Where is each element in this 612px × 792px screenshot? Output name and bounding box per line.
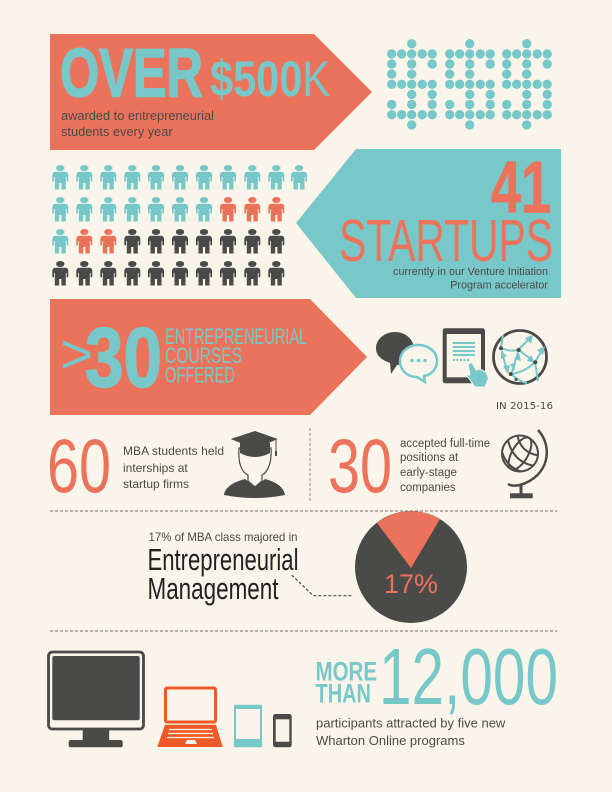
chart: people pictogram xyxy=(52,165,307,286)
text: entrepreneurial courses offered: COURSES xyxy=(165,343,242,368)
text: internships: startup firms xyxy=(123,477,189,491)
heading: more than: MORE xyxy=(316,657,377,687)
text: awarded: awarded to entrepreneurial xyxy=(61,108,214,123)
number: 60: 60 xyxy=(47,424,111,510)
arrow banner: salmon xyxy=(50,34,372,150)
text: 17% of class: 17% of MBA class majored in xyxy=(148,530,298,544)
block: entrepreneurial management xyxy=(148,530,352,606)
text: participants: participants attracted by five new xyxy=(316,715,506,730)
text: venture initiation: Program accelerator xyxy=(450,280,548,292)
text: positions: accepted full-time xyxy=(400,438,490,450)
heading: entrepreneurial management xyxy=(148,542,298,606)
text: awarded: students every year xyxy=(61,124,173,139)
heading: more than xyxy=(316,657,377,709)
text: venture initiation: currently in our Venture Initiation xyxy=(393,266,548,278)
icon: laptop xyxy=(157,688,223,747)
text: positions: companies xyxy=(400,482,456,494)
icon: desktop monitor xyxy=(48,652,144,747)
label: in 2015-16: IN 2015-16 xyxy=(496,401,553,412)
heading: $500K: $500K xyxy=(210,51,330,107)
pie chart: 17% xyxy=(355,511,467,623)
divider: vertical dashed xyxy=(309,428,311,502)
icon: globe xyxy=(497,430,547,498)
icon: phone xyxy=(273,714,292,747)
heading: OVER: OVER xyxy=(60,34,203,112)
panel: 41 startups xyxy=(296,148,561,298)
leader line xyxy=(292,575,352,596)
divider xyxy=(50,630,557,632)
text: internships: MBA students held xyxy=(123,444,224,458)
stat: 60 MBA students xyxy=(47,424,285,510)
stat: 30 full-time xyxy=(328,424,547,510)
text: positions: early-stage xyxy=(400,467,457,479)
heading: entrepreneurial management: Management xyxy=(148,571,279,606)
text: internships: interships at xyxy=(123,461,188,475)
text: entrepreneurial courses offered: OFFERED xyxy=(165,363,235,388)
text: entrepreneurial courses offered: ENTREPRENEURIAL xyxy=(165,324,307,349)
icon: chat bubbles xyxy=(376,332,437,382)
icon: dollar signs made of dots xyxy=(387,39,552,130)
panel: 30 courses xyxy=(50,299,367,415)
text: entrepreneurial courses offered xyxy=(165,324,307,388)
pie label: 17% xyxy=(384,569,438,599)
icon: network globe xyxy=(494,330,546,384)
icon: tablet xyxy=(234,705,262,747)
text: participants: Wharton Online programs xyxy=(316,733,465,748)
heading: 30: 30 xyxy=(85,310,162,404)
stat: 12,000 participants xyxy=(316,632,558,748)
number: 30: 30 xyxy=(328,424,392,510)
text: positions: positions at xyxy=(400,452,459,464)
icon: tablet with hand xyxy=(443,328,488,387)
heading: more than: THAN xyxy=(316,679,371,709)
arrow banner: teal xyxy=(296,149,561,298)
panel: over $500K xyxy=(50,34,372,150)
divider xyxy=(50,510,557,512)
heading: greater than: > xyxy=(60,322,93,385)
heading: 41: 41 xyxy=(491,148,551,228)
arrow banner: salmon xyxy=(50,299,367,415)
heading: entrepreneurial management: Entrepreneurial xyxy=(148,542,298,577)
icon: graduate xyxy=(224,431,285,498)
